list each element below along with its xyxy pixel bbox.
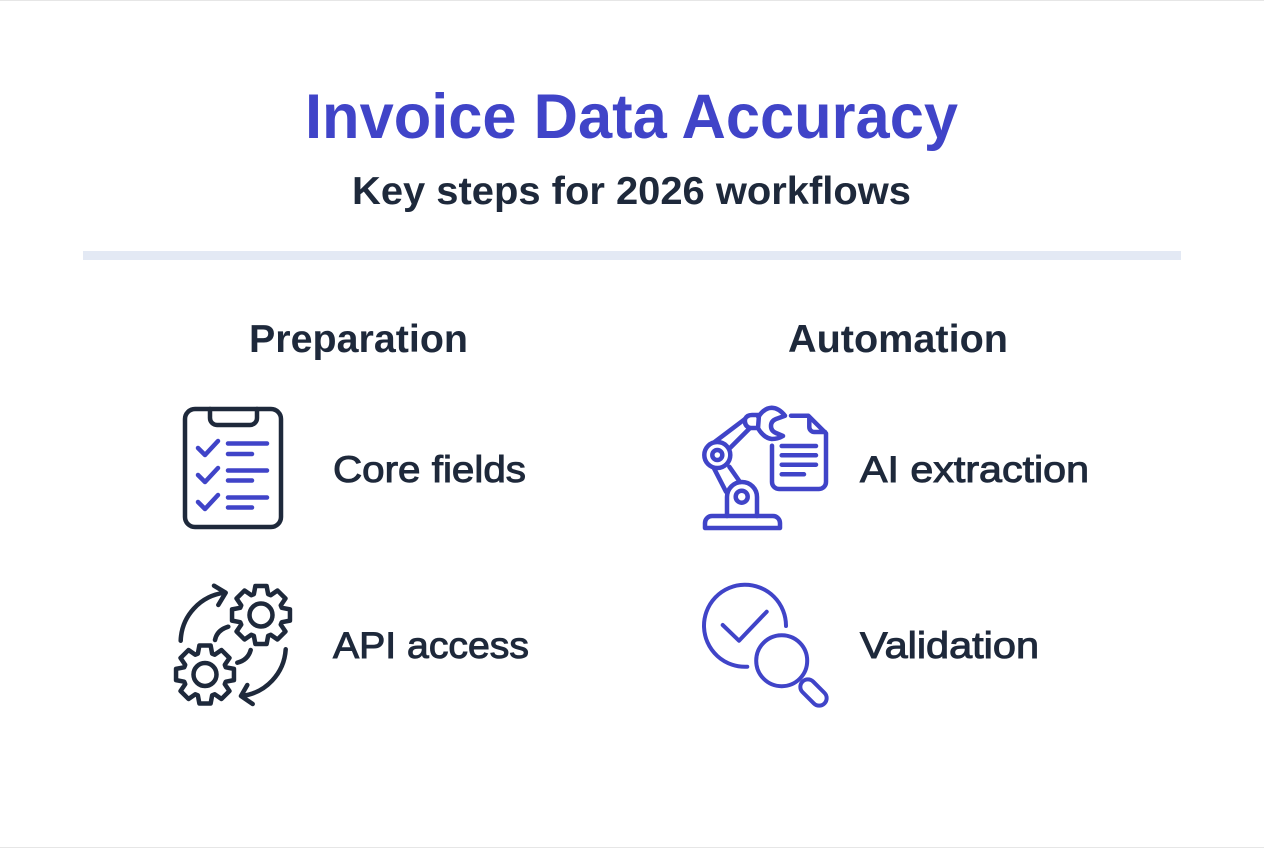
heading: automation: Automation [788,318,1008,361]
label: api access: API access [333,625,529,666]
icon: robot arm with document [704,408,826,528]
label: core fields: Core fields [333,449,526,490]
title: Invoice Data Accuracy [305,82,958,152]
panel: automation [704,318,1089,709]
heading: preparation: Preparation [249,318,468,361]
label: validation: Validation [860,625,1039,666]
label: ai extraction: AI extraction [860,449,1089,490]
icon: gears and arrows [176,586,290,704]
subtitle: Key steps for 2026 workflows [352,170,911,213]
icon: clipboard checklist [185,409,281,527]
icon: validation magnifier [704,585,830,709]
panel: preparation [176,318,529,704]
